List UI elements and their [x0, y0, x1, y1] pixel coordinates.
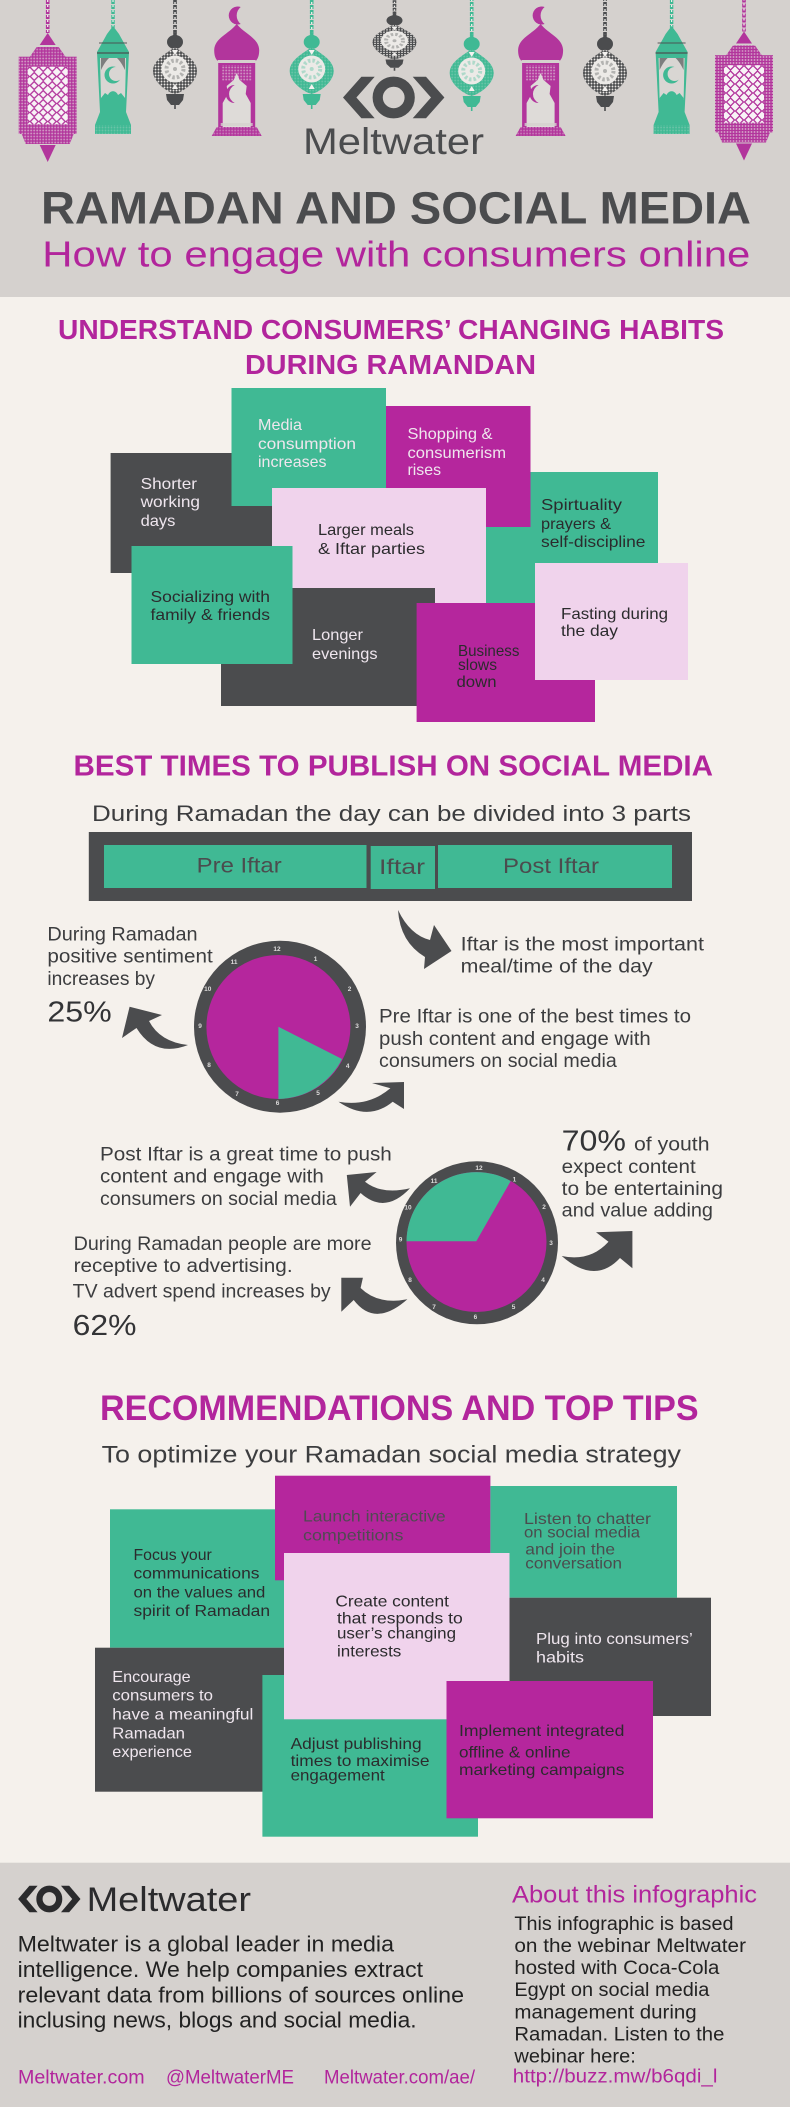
card: spirituality	[485, 472, 658, 604]
card: focus communications: on the values and	[134, 1584, 265, 1601]
Meltwater logo mark	[343, 77, 444, 118]
card: socializing: family & friends	[150, 607, 270, 624]
clock chart: pre iftar: 11	[231, 959, 238, 966]
clock chart: post iftar: 5	[512, 1304, 516, 1311]
segment: post iftar	[438, 845, 672, 888]
about text: http://buzz.mw/b6qdi_l	[513, 2067, 717, 2088]
day timeline bar	[89, 832, 692, 901]
card: create content: interests	[337, 1644, 401, 1661]
about text: management during	[514, 2002, 697, 2023]
card: create content	[284, 1553, 510, 1719]
card: plug into habits: Plug into consumers’	[536, 1631, 693, 1648]
card: business slows down: down	[456, 674, 496, 691]
card: larger meals: Larger meals	[318, 522, 414, 539]
clock chart: pre iftar: 1	[314, 956, 318, 963]
card: spirituality: prayers &	[541, 516, 611, 533]
clock chart: pre iftar: 10	[204, 986, 212, 993]
clock chart: post iftar: 9	[399, 1236, 403, 1244]
text: positive sentiment stat: positive sentiment	[47, 947, 213, 968]
clock chart: post iftar: 1	[513, 1176, 517, 1184]
lantern: green round right	[450, 0, 494, 111]
card: integrated campaigns	[446, 1681, 653, 1818]
about text	[513, 1914, 747, 2088]
text: positive sentiment stat: During Ramadan	[47, 925, 198, 946]
segment: pre iftar	[104, 845, 366, 888]
clock chart: pre iftar: 2	[348, 986, 352, 993]
card: longer evenings: Longer	[312, 627, 364, 644]
clock chart: post iftar: 4	[541, 1277, 545, 1284]
footer description: Meltwater is a global leader in media	[18, 1932, 395, 1957]
arrow: to post iftar note	[347, 1172, 410, 1207]
clock chart: post iftar: 2	[542, 1204, 546, 1211]
about text: hosted with Coca-Cola	[514, 1958, 720, 1979]
lantern: purple square left	[19, 0, 77, 162]
header panel	[0, 0, 790, 297]
card: plug into habits	[510, 1598, 711, 1716]
text: post iftar note: consumers on social media	[100, 1189, 337, 1210]
segment: iftar: Iftar	[379, 856, 425, 879]
footer description: relevant data from billions of sources online	[18, 1982, 464, 2007]
card: integrated campaigns: marketing campaigns	[459, 1762, 624, 1779]
text: tv advert stat: receptive to advertising.	[74, 1256, 293, 1277]
lantern: purple dome left	[212, 6, 262, 136]
text: youth stat: and value adding	[562, 1201, 713, 1222]
card: larger meals	[272, 488, 486, 603]
card: focus communications	[110, 1509, 284, 1648]
text: positive sentiment stat: increases by	[47, 969, 155, 990]
text: tv advert stat: 62%	[73, 1310, 136, 1342]
card: socializing	[132, 546, 292, 664]
text: post iftar note: Post Iftar is a great time to push	[100, 1145, 392, 1166]
card: adjust publishing: times to maximise	[291, 1753, 430, 1770]
about text: This infographic is based	[514, 1914, 734, 1935]
card: shopping and consumerism: rises	[408, 462, 441, 479]
clock chart: pre iftar	[194, 941, 366, 1113]
card: media consumption: increases	[258, 454, 326, 471]
about heading: About this infographic	[512, 1881, 757, 1908]
lantern: purple square right	[715, 0, 773, 160]
card: adjust publishing: engagement	[291, 1767, 385, 1784]
card: create content: that responds to	[337, 1611, 463, 1628]
card: meaningful experience: have a meaningful	[112, 1706, 253, 1723]
arrow: to pre iftar note	[338, 1082, 404, 1112]
heading: understand consumers: UNDERSTAND CONSUMERS’ CHANGING HABITS	[58, 314, 724, 345]
card: fasting: Fasting during	[561, 606, 668, 623]
card: listen to chatter: Listen to chatter	[524, 1511, 652, 1528]
text: positive sentiment stat	[47, 925, 213, 1029]
about text: Ramadan. Listen to the	[514, 2024, 724, 2045]
card: focus communications: Focus your	[134, 1547, 212, 1564]
clock chart: post iftar: 12	[475, 1165, 483, 1172]
clock chart: pre iftar: 12	[273, 946, 281, 953]
arrow: to youth stat	[562, 1231, 632, 1271]
card: shorter working days: Shorter	[141, 476, 198, 493]
clock chart: post iftar: 11	[431, 1178, 438, 1185]
footer description: intelligence. We help companies extract	[18, 1957, 423, 1982]
footer description: inclusing news, blogs and social media.	[18, 2008, 417, 2033]
about text: on the webinar Meltwater	[514, 1936, 747, 1957]
clock chart: post iftar: 8	[408, 1277, 412, 1284]
card: meaningful experience: experience	[112, 1744, 192, 1761]
heading: understand consumers: DURING RAMANDAN	[245, 349, 536, 380]
text: youth stat	[562, 1126, 723, 1222]
footer logo: Meltwater	[87, 1881, 251, 1919]
about text: Egypt on social media	[514, 1980, 710, 2001]
clock chart: pre iftar: 7	[235, 1091, 239, 1098]
card: shorter working days	[111, 453, 291, 573]
card: socializing: Socializing with	[150, 589, 270, 606]
clock chart: pre iftar: 5	[316, 1090, 320, 1097]
card: fasting	[535, 563, 688, 680]
card: listen to chatter: on social media	[524, 1525, 640, 1542]
card: shorter working days: days	[141, 513, 175, 530]
card: listen to chatter	[490, 1486, 677, 1598]
card: shopping and consumerism	[386, 406, 530, 527]
clock chart: post iftar	[396, 1161, 558, 1324]
text: iftar note: meal/time of the day	[461, 956, 653, 977]
segment: iftar	[371, 846, 435, 889]
text: pre iftar note: Pre Iftar is one of the best times to	[379, 1007, 691, 1028]
clock chart: post iftar: 6	[474, 1314, 478, 1321]
card: shopping and consumerism: Shopping &	[408, 426, 493, 443]
card: media consumption: Media	[258, 417, 302, 434]
card: integrated campaigns: Implement integrated	[459, 1723, 624, 1740]
clock chart: pre iftar: 4	[346, 1063, 350, 1070]
text: positive sentiment stat: 25%	[47, 997, 112, 1029]
card: shopping and consumerism: consumerism	[408, 445, 506, 462]
text: iftar note	[461, 935, 705, 977]
footer links: Meltwater.com	[18, 2067, 145, 2088]
card: listen to chatter: and join the	[525, 1541, 615, 1558]
heading: understand consumers	[58, 314, 724, 380]
card: meaningful experience: Encourage	[112, 1669, 191, 1686]
segment: pre iftar: Pre Iftar	[197, 855, 282, 878]
card: spirituality: self-discipline	[541, 534, 646, 551]
card: longer evenings: evenings	[312, 646, 378, 663]
about text: webinar here:	[513, 2046, 636, 2067]
card: meaningful experience: Ramadan	[112, 1725, 185, 1742]
card: media consumption	[232, 388, 386, 506]
lantern: green cylinder left	[95, 0, 131, 134]
subtitle: How to engage with consumers online	[42, 234, 750, 275]
clock chart: pre iftar: 9	[198, 1023, 202, 1030]
card: interactive competitions: competitions	[303, 1528, 403, 1545]
panel: recommendations collage	[95, 1476, 711, 1837]
card: business slows down: slows	[458, 657, 497, 674]
card: larger meals: & Iftar parties	[318, 541, 425, 558]
subheading: optimize: To optimize your Ramadan social media strategy	[102, 1442, 681, 1469]
clock chart: post iftar: 7	[432, 1304, 436, 1311]
lantern: green round left	[290, 0, 334, 109]
arrow: to positive sentiment	[122, 1007, 188, 1049]
card: adjust publishing: Adjust publishing	[291, 1736, 422, 1753]
text: tv advert stat	[73, 1234, 372, 1342]
footer panel	[0, 1863, 790, 2107]
text: post iftar note: content and engage with	[100, 1167, 324, 1188]
lantern: green cylinder right	[654, 0, 690, 134]
clock chart: pre iftar: 6	[276, 1100, 280, 1107]
text: post iftar note	[100, 1145, 392, 1210]
footer links: @MeltwaterME	[166, 2067, 294, 2088]
clock chart: post iftar: 10	[404, 1204, 412, 1212]
heading: best times: BEST TIMES TO PUBLISH ON SOCIAL MEDIA	[74, 750, 713, 782]
card: create content: user’s changing	[337, 1625, 456, 1642]
segment: post iftar: Post Iftar	[503, 855, 599, 878]
card: longer evenings	[221, 588, 435, 706]
text: youth stat: 70%	[562, 1126, 626, 1158]
arrow: to iftar note	[398, 910, 452, 969]
footer logo	[18, 1881, 251, 1919]
footer description	[18, 1932, 464, 2033]
card: spirituality: Spirtuality	[541, 497, 622, 514]
Meltwater wordmark: Meltwater	[303, 121, 484, 162]
card: meaningful experience	[95, 1648, 284, 1792]
card: plug into habits: habits	[536, 1649, 584, 1666]
panel: consumer habits collage	[111, 388, 688, 722]
lantern: purple dome right	[516, 6, 566, 136]
card: interactive competitions: Launch interactive	[303, 1509, 446, 1526]
lantern: dark round left	[153, 0, 197, 109]
title: RAMADAN AND SOCIAL MEDIA	[41, 182, 751, 233]
text: tv advert stat: During Ramadan people are more	[74, 1234, 372, 1255]
card: adjust publishing	[262, 1675, 478, 1837]
lantern: dark round right	[583, 0, 627, 111]
card: listen to chatter: conversation	[525, 1556, 622, 1573]
text: pre iftar note: push content and engage with	[379, 1029, 651, 1050]
card: business slows down: Business	[458, 643, 519, 660]
card: fasting: the day	[561, 623, 618, 640]
card: media consumption: consumption	[258, 436, 356, 453]
text: youth stat: to be entertaining	[562, 1179, 723, 1200]
text: tv advert stat: TV advert spend increases by	[73, 1282, 331, 1303]
text: youth stat: of youth	[634, 1135, 710, 1156]
text: pre iftar note: consumers on social media	[379, 1051, 617, 1072]
text: pre iftar note	[379, 1007, 691, 1072]
card: focus communications: spirit of Ramadan	[134, 1603, 270, 1620]
arrow: to tv advert stat	[341, 1278, 407, 1314]
card: integrated campaigns: offline & online	[459, 1745, 571, 1762]
card: create content: Create content	[335, 1594, 450, 1611]
card: shorter working days: working	[140, 494, 200, 511]
footer links: Meltwater.com/ae/	[324, 2067, 476, 2088]
card: meaningful experience: consumers to	[112, 1688, 213, 1705]
clock chart: post iftar: 3	[549, 1240, 553, 1247]
clock chart: pre iftar: 3	[355, 1023, 359, 1030]
text: iftar note: Iftar is the most important	[461, 935, 705, 956]
text: youth stat: expect content	[562, 1157, 696, 1178]
card: focus communications: communications	[134, 1566, 260, 1583]
footer links	[18, 2067, 476, 2088]
card: interactive competitions	[275, 1476, 490, 1580]
clock chart: pre iftar: 8	[207, 1062, 211, 1069]
card: business slows down	[417, 603, 595, 722]
heading: recommendations: RECOMMENDATIONS AND TOP TIPS	[100, 1389, 699, 1428]
subheading: three parts: During Ramadan the day can be divided into 3 parts	[92, 801, 691, 826]
lantern: dark round centre	[372, 0, 416, 71]
